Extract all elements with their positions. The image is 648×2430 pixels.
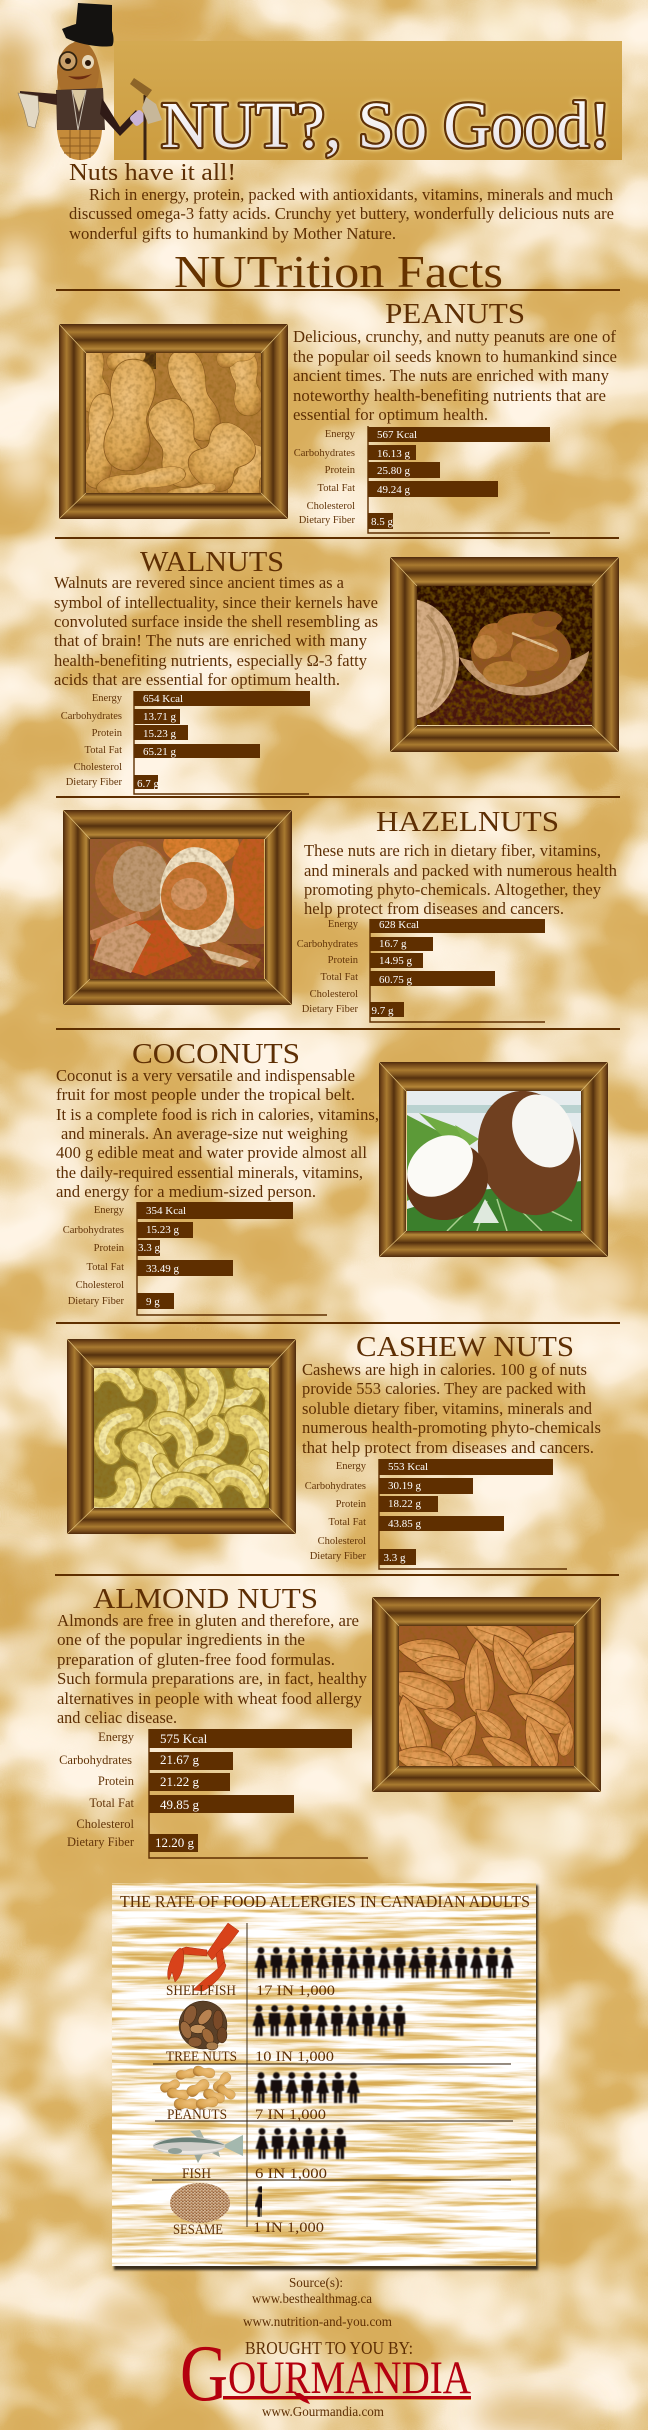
text block: cashew nuts: that help protect from diseases and cancers. bbox=[302, 1438, 594, 1457]
text block: coconuts: It is a complete food is rich in calories, vitamins, bbox=[56, 1105, 379, 1124]
bar chart: walnuts: 13.71 g bbox=[143, 711, 176, 723]
text block: almond nuts: one of the popular ingredients in the bbox=[57, 1630, 305, 1649]
bar chart: almond nuts: 21.67 g bbox=[160, 1752, 200, 1767]
text block: peanuts bbox=[293, 327, 617, 424]
bar chart: cashew nuts: 30.19 g bbox=[388, 1480, 422, 1492]
bar chart: almond nuts: 575 Kcal bbox=[160, 1731, 208, 1746]
text block: hazelnuts bbox=[304, 841, 617, 918]
intro text block bbox=[69, 160, 614, 243]
icon: fish bbox=[153, 2130, 243, 2163]
logo: Gourmandia bbox=[180, 2330, 471, 2418]
icon: lobster bbox=[168, 1923, 239, 1991]
sources bbox=[243, 2276, 392, 2330]
text block: walnuts: Walnuts are revered since ancient times as a bbox=[54, 573, 344, 592]
bar chart: hazelnuts: Energy bbox=[328, 919, 359, 930]
bar chart: cashew nuts bbox=[305, 1459, 567, 1569]
text block: almond nuts bbox=[57, 1611, 367, 1727]
text block: walnuts bbox=[54, 573, 378, 689]
text block: peanuts: the popular oil seeds known to humankind since bbox=[293, 347, 617, 366]
bar chart: hazelnuts: Cholesterol bbox=[310, 989, 358, 1000]
text block: walnuts: acids that are essential for optimum health. bbox=[54, 670, 340, 689]
bar chart: coconuts: Protein bbox=[94, 1243, 125, 1254]
pictogram: 10 people bbox=[252, 2005, 405, 2036]
value: 1 in 1,000: 1 IN 1,000 bbox=[253, 2220, 324, 2236]
row: fish bbox=[153, 2128, 346, 2182]
text block: cashew nuts: provide 553 calories. They are packed with bbox=[302, 1379, 586, 1398]
text block: cashew nuts bbox=[302, 1360, 601, 1457]
text block: hazelnuts: and minerals and packed with numerous health bbox=[304, 861, 617, 880]
bar chart: walnuts: 654 Kcal bbox=[143, 693, 183, 705]
bar chart: peanuts: Cholesterol bbox=[307, 501, 355, 512]
text block: coconuts: 400 g edible meat and water provide almost all bbox=[56, 1143, 367, 1162]
bar chart: walnuts: Cholesterol bbox=[74, 762, 122, 773]
text block: coconuts bbox=[56, 1066, 379, 1201]
text block: walnuts: symbol of intellectuality, since their kernels have bbox=[54, 593, 378, 612]
panel: food allergies bbox=[112, 1883, 538, 2270]
text block: cashew nuts: soluble dietary fiber, vitamins, minerals and bbox=[302, 1399, 592, 1418]
credit line: BROUGHT TO YOU BY: bbox=[245, 2338, 413, 2358]
bar chart: almond nuts: Carbohydrates bbox=[59, 1753, 132, 1767]
pictogram: 7 people bbox=[254, 2072, 360, 2103]
panel: cashew nuts bbox=[67, 1331, 601, 1569]
bar chart: walnuts: 15.23 g bbox=[143, 728, 176, 740]
icon: sesame seeds bbox=[170, 2183, 230, 2223]
sources: www.nutrition-and-you.com bbox=[243, 2315, 392, 2330]
text block: almond nuts: and celiac disease. bbox=[57, 1708, 177, 1727]
bar chart: walnuts: Carbohydrates bbox=[61, 711, 122, 722]
bar chart: almond nuts: 12.20 g bbox=[155, 1835, 194, 1850]
bar chart: hazelnuts: 628 Kcal bbox=[379, 919, 419, 931]
bar chart: peanuts: Dietary Fiber bbox=[299, 515, 355, 526]
photo: peanuts in frame bbox=[59, 324, 288, 519]
bar chart: coconuts: Carbohydrates bbox=[63, 1225, 124, 1236]
bar chart: walnuts: Dietary Fiber bbox=[66, 777, 122, 788]
logo: Gourmandia: G bbox=[180, 2330, 228, 2418]
heading: hazelnuts: HAZELNUTS bbox=[376, 806, 559, 838]
bar chart: peanuts: 567 Kcal bbox=[377, 429, 417, 441]
section heading: NUTrition Facts: NUTrition Facts bbox=[174, 246, 503, 297]
bar chart: walnuts: Protein bbox=[92, 728, 123, 739]
bar chart: cashew nuts: 43.85 g bbox=[388, 1518, 422, 1530]
heading: walnuts: WALNUTS bbox=[140, 546, 284, 578]
bar chart: coconuts: Cholesterol bbox=[76, 1280, 124, 1291]
text block: walnuts: health-benefiting nutrients, especially Ω-3 fatty bbox=[54, 651, 367, 670]
bar chart: cashew nuts: Protein bbox=[336, 1499, 367, 1510]
bar chart: almond nuts: Protein bbox=[98, 1774, 135, 1788]
label: sesame: SESAME bbox=[173, 2222, 223, 2238]
text block: cashew nuts: Cashews are high in calories. 100 g of nuts bbox=[302, 1360, 587, 1379]
photo: almonds in frame bbox=[372, 1597, 601, 1792]
text block: coconuts: and minerals. An average-size nut weighing bbox=[61, 1124, 348, 1143]
bar chart: walnuts: Total Fat bbox=[85, 745, 122, 756]
bar chart: coconuts: 9 g bbox=[146, 1296, 160, 1308]
bar chart: coconuts bbox=[63, 1202, 327, 1315]
bar chart: coconuts: Dietary Fiber bbox=[68, 1296, 124, 1307]
text block: peanuts: essential for optimum health. bbox=[293, 405, 488, 424]
bar chart: hazelnuts: Protein bbox=[328, 955, 359, 966]
bar chart: peanuts: Protein bbox=[325, 465, 356, 476]
icon: mixed nuts bbox=[178, 2001, 227, 2050]
text block: almond nuts: preparation of gluten-free food formulas. bbox=[57, 1650, 335, 1669]
value: 6 in 1,000: 6 IN 1,000 bbox=[255, 2166, 327, 2182]
text block: coconuts: the daily-required essential minerals, vitamins, bbox=[56, 1163, 363, 1182]
label: shellfish: SHELLFISH bbox=[166, 1983, 236, 1999]
pictogram: 17 people bbox=[254, 1947, 514, 1978]
text block: peanuts: Delicious, crunchy, and nutty peanuts are one of bbox=[293, 327, 616, 346]
text block: peanuts: noteworthy health-benefiting nutrients that are bbox=[293, 386, 606, 405]
bar chart: peanuts: 49.24 g bbox=[377, 484, 410, 496]
header band bbox=[114, 41, 622, 160]
logo: Gourmandia: OURMANDIA bbox=[228, 2352, 471, 2404]
bar chart: cashew nuts: Dietary Fiber bbox=[310, 1551, 366, 1562]
text block: hazelnuts: help protect from diseases and cancers. bbox=[304, 899, 564, 918]
bar chart: almond nuts bbox=[59, 1729, 368, 1858]
intro paragraph: discussed omega-3 fatty acids. Crunchy yet buttery, wonderfully delicious nuts are bbox=[69, 204, 614, 223]
photo: hazelnuts in frame bbox=[63, 810, 292, 1005]
sources: www.besthealthmag.ca bbox=[252, 2292, 373, 2307]
text block: hazelnuts: These nuts are rich in dietary fiber, vitamins, bbox=[304, 841, 601, 860]
bar chart: almond nuts: 49.85 g bbox=[160, 1797, 200, 1812]
bar chart: peanuts bbox=[294, 426, 550, 533]
text block: walnuts: that of brain! The nuts are enriched with many bbox=[54, 631, 367, 650]
bar chart: almond nuts: 21.22 g bbox=[160, 1774, 200, 1789]
row: sesame bbox=[170, 2183, 324, 2238]
bar chart: walnuts: 65.21 g bbox=[143, 746, 176, 758]
bar chart: walnuts bbox=[61, 691, 310, 794]
bar chart: walnuts: 6.7 g bbox=[137, 778, 160, 790]
bar chart: coconuts: 15.23 g bbox=[146, 1224, 180, 1236]
website: www.Gourmandia.com bbox=[262, 2405, 384, 2420]
row: peanuts bbox=[159, 2065, 360, 2123]
heading: almond nuts: ALMOND NUTS bbox=[93, 1583, 318, 1615]
bar chart: cashew nuts: 18.22 g bbox=[388, 1498, 422, 1510]
text block: cashew nuts: numerous health-promoting phyto-chemicals bbox=[302, 1418, 601, 1437]
bar chart: hazelnuts bbox=[297, 919, 545, 1022]
row: tree nuts bbox=[166, 2001, 405, 2065]
intro heading: Nuts have it all! bbox=[69, 160, 236, 186]
bar chart: cashew nuts: 3.3 g bbox=[384, 1552, 406, 1564]
intro paragraph bbox=[69, 185, 614, 243]
bar chart: cashew nuts: 553 Kcal bbox=[388, 1461, 428, 1473]
photo: walnuts in frame bbox=[390, 557, 620, 752]
text block: coconuts: Coconut is a very versatile and indispensable bbox=[56, 1066, 355, 1085]
bar chart: peanuts: Carbohydrates bbox=[294, 448, 355, 459]
value: 7 in 1,000: 7 IN 1,000 bbox=[255, 2107, 326, 2123]
heading: peanuts: PEANUTS bbox=[385, 298, 525, 330]
photo: cashews in frame bbox=[67, 1339, 296, 1534]
bar chart: coconuts: 354 Kcal bbox=[146, 1205, 186, 1217]
bar chart: almond nuts: Energy bbox=[98, 1730, 135, 1744]
bar chart: coconuts: Energy bbox=[94, 1205, 125, 1216]
bar chart: hazelnuts: Total Fat bbox=[321, 972, 358, 983]
bar chart: cashew nuts: Energy bbox=[336, 1461, 367, 1472]
heading: coconuts: COCONUTS bbox=[132, 1038, 300, 1070]
bar chart: almond nuts: Cholesterol bbox=[76, 1817, 135, 1831]
bar chart: hazelnuts: 16.7 g bbox=[379, 938, 407, 950]
panel: hazelnuts bbox=[63, 806, 617, 1022]
icon: peanut pile bbox=[159, 2065, 237, 2110]
row: shellfish bbox=[166, 1923, 514, 1999]
value: 10 in 1,000: 10 IN 1,000 bbox=[255, 2049, 334, 2065]
bar chart: almond nuts: Dietary Fiber bbox=[67, 1835, 135, 1849]
bar chart: coconuts: 33.49 g bbox=[146, 1263, 180, 1275]
text block: peanuts: ancient times. The nuts are enriched with many bbox=[293, 366, 609, 385]
heading: allergy rate: THE RATE OF FOOD ALLERGIES IN CANADIAN ADULTS bbox=[120, 1892, 530, 1911]
bar chart: hazelnuts: 14.95 g bbox=[379, 955, 412, 967]
bar chart: coconuts: Total Fat bbox=[87, 1262, 124, 1273]
bar chart: cashew nuts: Total Fat bbox=[329, 1517, 366, 1528]
mascot: peanut gentleman with top hat and cane bbox=[18, 3, 162, 160]
bar chart: hazelnuts: Carbohydrates bbox=[297, 939, 358, 950]
panel: walnuts bbox=[54, 546, 619, 794]
bar chart: cashew nuts: Cholesterol bbox=[318, 1536, 366, 1547]
sources: Source(s): bbox=[289, 2276, 343, 2291]
panel: almond nuts bbox=[57, 1583, 601, 1858]
value: 17 in 1,000: 17 IN 1,000 bbox=[256, 1983, 335, 1999]
bar chart: peanuts: 16.13 g bbox=[377, 448, 410, 460]
text block: coconuts: and energy for a medium-sized person. bbox=[56, 1182, 316, 1201]
bar chart: hazelnuts: 60.75 g bbox=[379, 974, 412, 986]
label: fish: FISH bbox=[182, 2166, 211, 2182]
label: peanuts: PEANUTS bbox=[167, 2107, 227, 2123]
intro paragraph: Rich in energy, protein, packed with antioxidants, vitamins, minerals and much bbox=[89, 185, 613, 204]
text block: almond nuts: Such formula preparations are, in fact, healthy bbox=[57, 1669, 367, 1688]
bar chart: hazelnuts: 9.7 g bbox=[372, 1005, 394, 1017]
bar chart: peanuts: 8.5 g bbox=[371, 516, 394, 528]
bar chart: cashew nuts: Carbohydrates bbox=[305, 1481, 366, 1492]
bar chart: almond nuts: Total Fat bbox=[89, 1796, 135, 1810]
text block: coconuts: fruit for most people under the tropical belt. bbox=[56, 1085, 355, 1104]
bar chart: hazelnuts: Dietary Fiber bbox=[302, 1004, 358, 1015]
panel: coconuts bbox=[56, 1038, 608, 1315]
bar chart: peanuts: Total Fat bbox=[318, 483, 355, 494]
heading: cashew nuts: CASHEW NUTS bbox=[356, 1331, 574, 1363]
bar chart: peanuts: Energy bbox=[325, 429, 356, 440]
bar chart: coconuts: 3.3 g bbox=[138, 1242, 160, 1254]
intro paragraph: wonderful gifts to humankind by Mother Nature. bbox=[69, 224, 396, 243]
photo: coconuts in frame bbox=[379, 1062, 608, 1257]
pictogram: 6 people bbox=[256, 2128, 346, 2159]
pictogram: half person bbox=[255, 2186, 262, 2217]
text block: walnuts: convoluted surface inside the shell resembling as bbox=[54, 612, 378, 631]
text block: almond nuts: Almonds are free in gluten and therefore, are bbox=[57, 1611, 359, 1630]
text block: almond nuts: alternatives in people with wheat food allergy bbox=[57, 1689, 362, 1708]
text block: hazelnuts: promoting phyto-chemicals. Altogether, they bbox=[304, 880, 601, 899]
panel: peanuts bbox=[59, 298, 617, 533]
label: tree nuts: TREE NUTS bbox=[166, 2049, 237, 2065]
bar chart: peanuts: 25.80 g bbox=[377, 465, 410, 477]
bar chart: walnuts: Energy bbox=[92, 693, 123, 704]
title: NUT?, So Good! bbox=[161, 89, 611, 162]
